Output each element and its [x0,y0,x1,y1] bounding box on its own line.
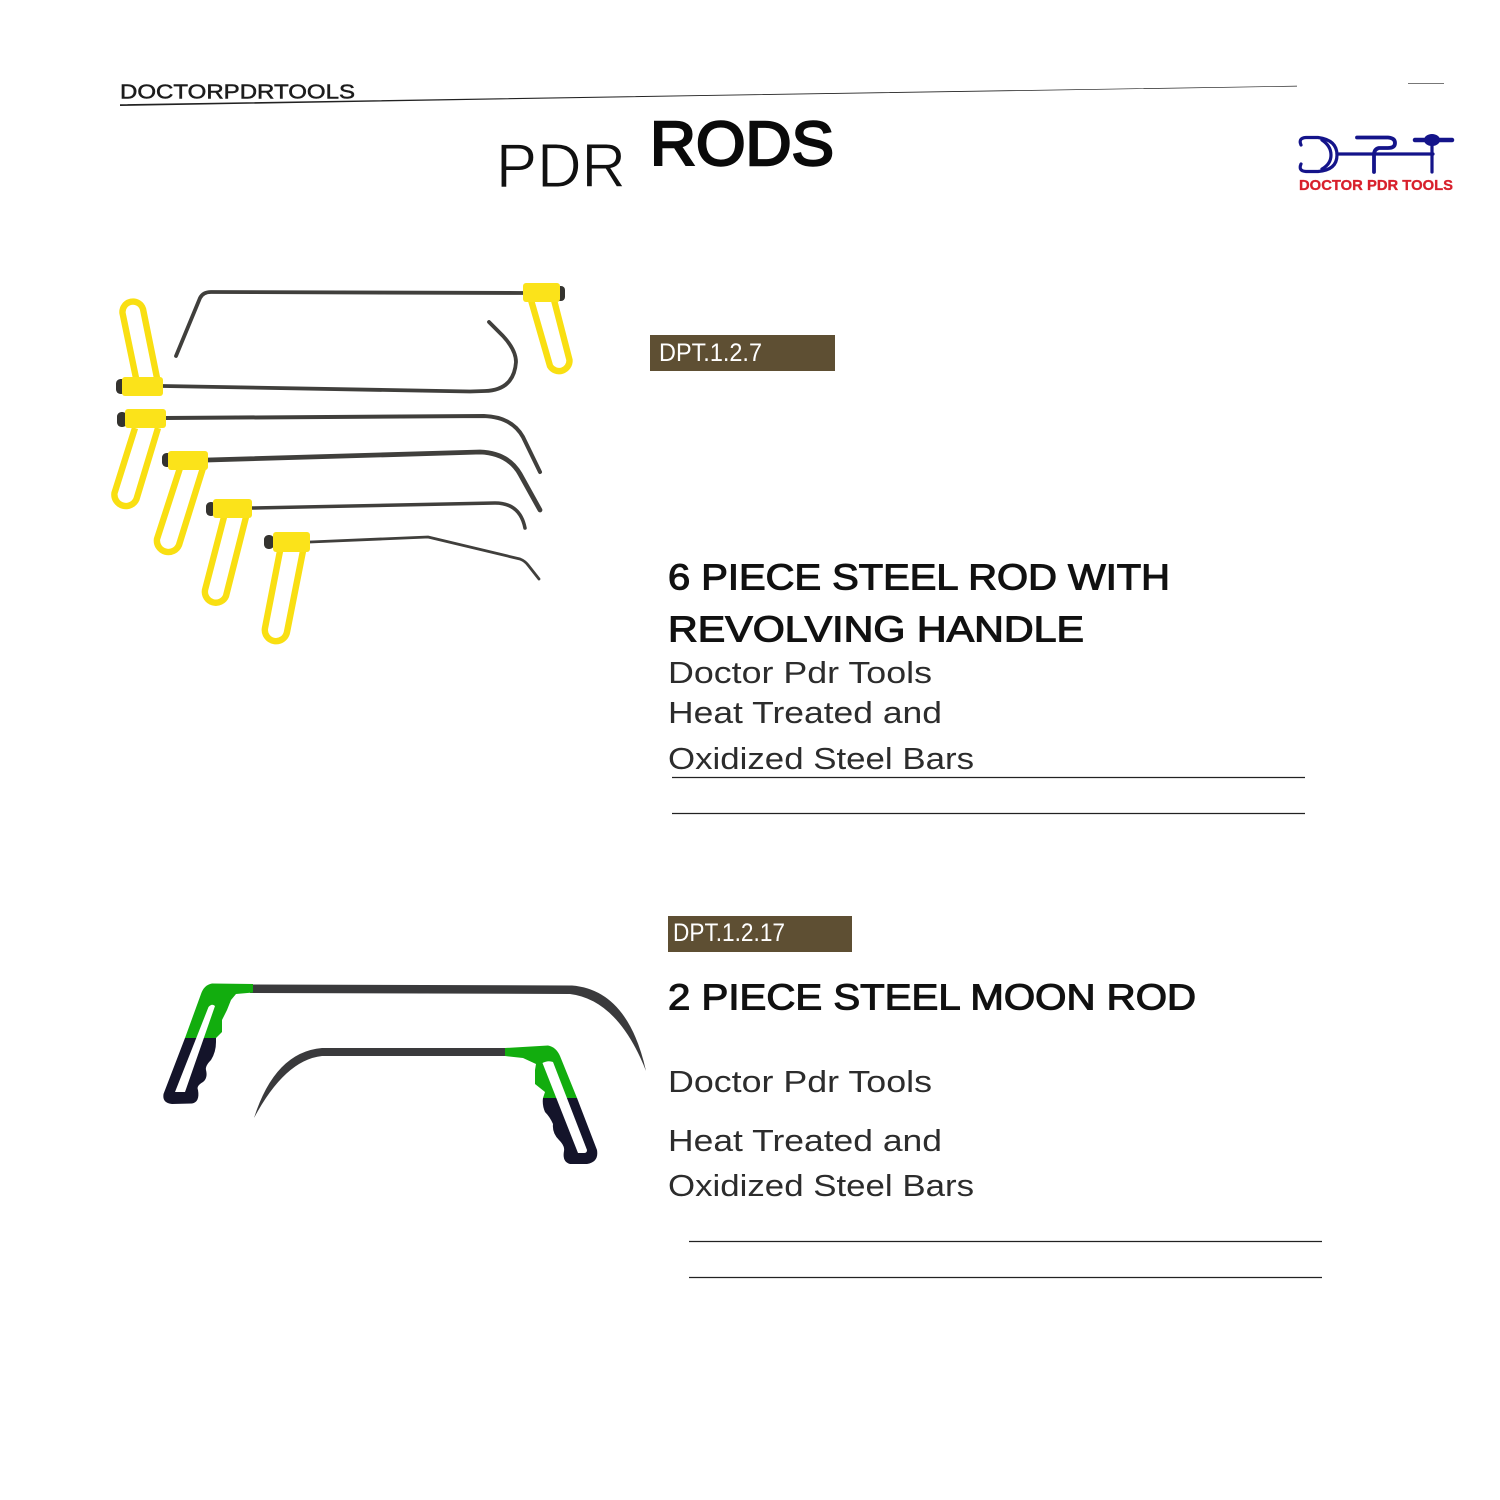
product code badge: DPT.1.2.17: DPT.1.2.17 [673,919,785,947]
heading: 6 piece steel rod: 6 PIECE STEEL ROD WITH [668,556,1170,598]
logo: Doctor PDR Tools [1299,134,1453,194]
moon rod large [163,984,646,1104]
heading: 6 piece steel rod [668,556,1170,650]
description: 6 piece rod: Oxidized Steel Bars [668,741,974,776]
logo: Doctor PDR Tools: DOCTOR PDR TOOLS [1299,178,1453,194]
header: brand name and rule: DOCTORPDRTOOLS [120,82,355,104]
rod 2: curved hook rod [116,302,516,396]
product image: 6 piece yellow handle rods [114,283,570,641]
product code badge: DPT.1.2.7 [650,335,835,371]
description: moon rod [668,1064,974,1203]
description: moon rod: Oxidized Steel Bars [668,1168,974,1203]
rod 4: medium bent rod [157,451,540,552]
heading: 2 piece moon rod: 2 PIECE STEEL MOON ROD [668,976,1196,1018]
title: PDR [496,132,626,201]
rod 5: short bent rod [205,499,525,603]
rod 3: long bent rod [114,409,540,506]
description: 6 piece rod: Heat Treated and [668,695,942,730]
heading: 6 piece steel rod: REVOLVING HANDLE [668,608,1084,650]
description: moon rod: Heat Treated and [668,1123,942,1158]
moon rod small [254,1046,597,1164]
description: moon rod: Doctor Pdr Tools [668,1064,932,1099]
rod 6: thin angled rod [264,532,539,641]
description: 6 piece rod: Doctor Pdr Tools [668,655,932,690]
title: RODS [650,110,834,179]
product code badge: DPT.1.2.7: DPT.1.2.7 [659,339,762,367]
product image: 2 piece moon rods [163,984,646,1164]
header: brand name and rule [120,82,1444,106]
title [496,110,834,201]
rod 1: top hooked rod [176,283,570,371]
product code badge: DPT.1.2.17 [668,916,852,952]
description: 6 piece rod [668,655,974,776]
